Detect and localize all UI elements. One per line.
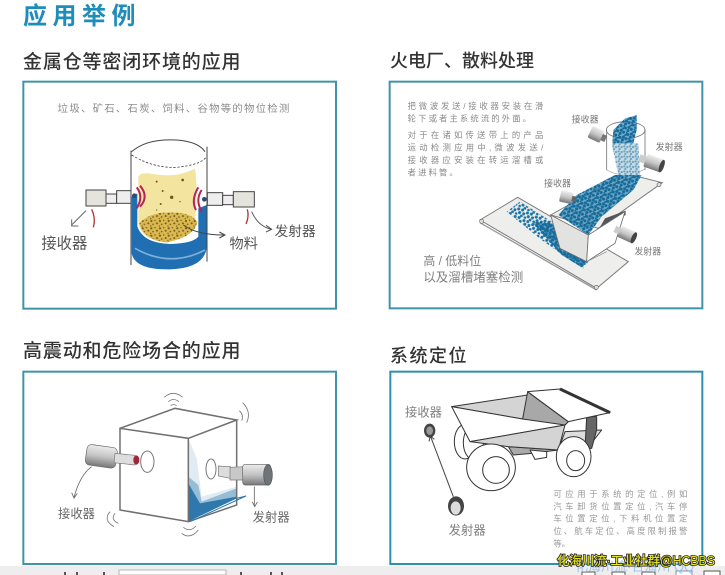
label: emitter: 发射器 bbox=[253, 510, 290, 525]
icon: top emitter sensor bbox=[637, 152, 666, 173]
panel: power plant bbox=[390, 82, 702, 308]
heading: high vibration: 高震动和危险场合的应用 bbox=[23, 340, 241, 362]
icon: emitter sensor bbox=[207, 192, 254, 224]
label: middle receiver: 接收器 bbox=[544, 177, 571, 188]
label: level detection: 高 / 低料位 bbox=[423, 253, 481, 268]
label: lower emitter: 发射器 bbox=[634, 245, 661, 256]
description text: 位、航车定位、高度限制报警 bbox=[553, 526, 687, 536]
panel: high vibration bbox=[23, 372, 336, 564]
illustration: dump truck bbox=[452, 389, 610, 491]
label: emitter: 发射器 bbox=[275, 224, 316, 239]
icon: emitter sensor bbox=[218, 464, 272, 485]
footer strip bbox=[0, 559, 725, 575]
icon: vibration marks bbox=[107, 393, 248, 536]
label: material: 物料 bbox=[229, 235, 258, 252]
description text: 对于在诸如传送带上的产品 bbox=[408, 130, 543, 140]
panel: system positioning bbox=[390, 372, 702, 564]
label: emitter: 发射器 bbox=[449, 523, 486, 538]
icon: left signal arcs bbox=[132, 186, 145, 208]
icon: emitter sensor bbox=[448, 496, 464, 516]
bin caption: 垃圾、矿石、石炭、饲料、谷物等的物位检测 bbox=[58, 102, 289, 115]
arrow: emitter bbox=[252, 487, 257, 507]
label: level detection bbox=[423, 253, 523, 285]
description text: 轮下或者主系统流的外面。 bbox=[408, 113, 531, 123]
footer strip: 化海川流·合海川 QQ bbox=[575, 559, 694, 574]
illustration: upper conveyor bbox=[551, 173, 662, 230]
icon: middle receiver sensor bbox=[559, 190, 577, 205]
illustration: chute bbox=[551, 175, 642, 262]
icon: receiver sensor bbox=[85, 444, 139, 469]
watermark: 化海川流·工业社群@HCBBS bbox=[557, 553, 715, 568]
illustration: silo bbox=[131, 140, 207, 269]
arrow: emitter bbox=[252, 212, 272, 232]
arrow: material bbox=[183, 225, 225, 238]
label: receiver: 接收器 bbox=[41, 236, 87, 253]
heading: metal bins: 金属仓等密闭环境的应用 bbox=[23, 51, 241, 73]
icon: right signal arcs bbox=[194, 187, 207, 212]
heading: system positioning: 系统定位 bbox=[390, 345, 468, 366]
watermark: 化海川流·工业社群@HCBBS bbox=[557, 553, 715, 568]
description text: 等。 bbox=[553, 539, 570, 549]
arrow: receiver bbox=[72, 211, 86, 226]
illustration: box bbox=[120, 408, 246, 522]
illustration: hopper bbox=[606, 115, 645, 175]
label: receiver: 接收器 bbox=[58, 506, 95, 521]
arrow: receiver bbox=[72, 467, 92, 498]
panel: metal bin bbox=[23, 82, 336, 309]
label: top emitter: 发射器 bbox=[656, 141, 683, 152]
description text: 运动检测应用中,微波发送/ bbox=[408, 142, 544, 152]
title: 应用举例 bbox=[23, 3, 141, 30]
description text: 车位置定位,下料机位置定 bbox=[553, 514, 687, 524]
label: receiver: 接收器 bbox=[405, 405, 442, 420]
description text: 把微波发送/接收器安装在滑 bbox=[408, 101, 543, 111]
description text: 可应用于系统的定位,例如 bbox=[553, 489, 687, 499]
description text: 者进料管。 bbox=[408, 168, 458, 178]
label: top receiver: 接收器 bbox=[572, 114, 599, 125]
icon: top receiver sensor bbox=[587, 126, 608, 145]
icon: lower emitter sensor bbox=[612, 223, 638, 244]
heading: power plant: 火电厂、散料处理 bbox=[390, 51, 534, 71]
description text bbox=[408, 101, 544, 178]
description text: 接收器应安装在转运溜槽或 bbox=[408, 155, 543, 165]
description text: 汽车卸货位置定位,汽车停 bbox=[553, 501, 687, 511]
description text bbox=[553, 489, 687, 549]
icon: receiver sensor bbox=[424, 424, 435, 438]
icon: receiver sensor bbox=[86, 190, 131, 227]
label: level detection: 以及溜槽堵塞检测 bbox=[423, 270, 523, 285]
illustration: lower conveyor bbox=[480, 197, 628, 290]
arrow: signal path bbox=[429, 436, 453, 497]
